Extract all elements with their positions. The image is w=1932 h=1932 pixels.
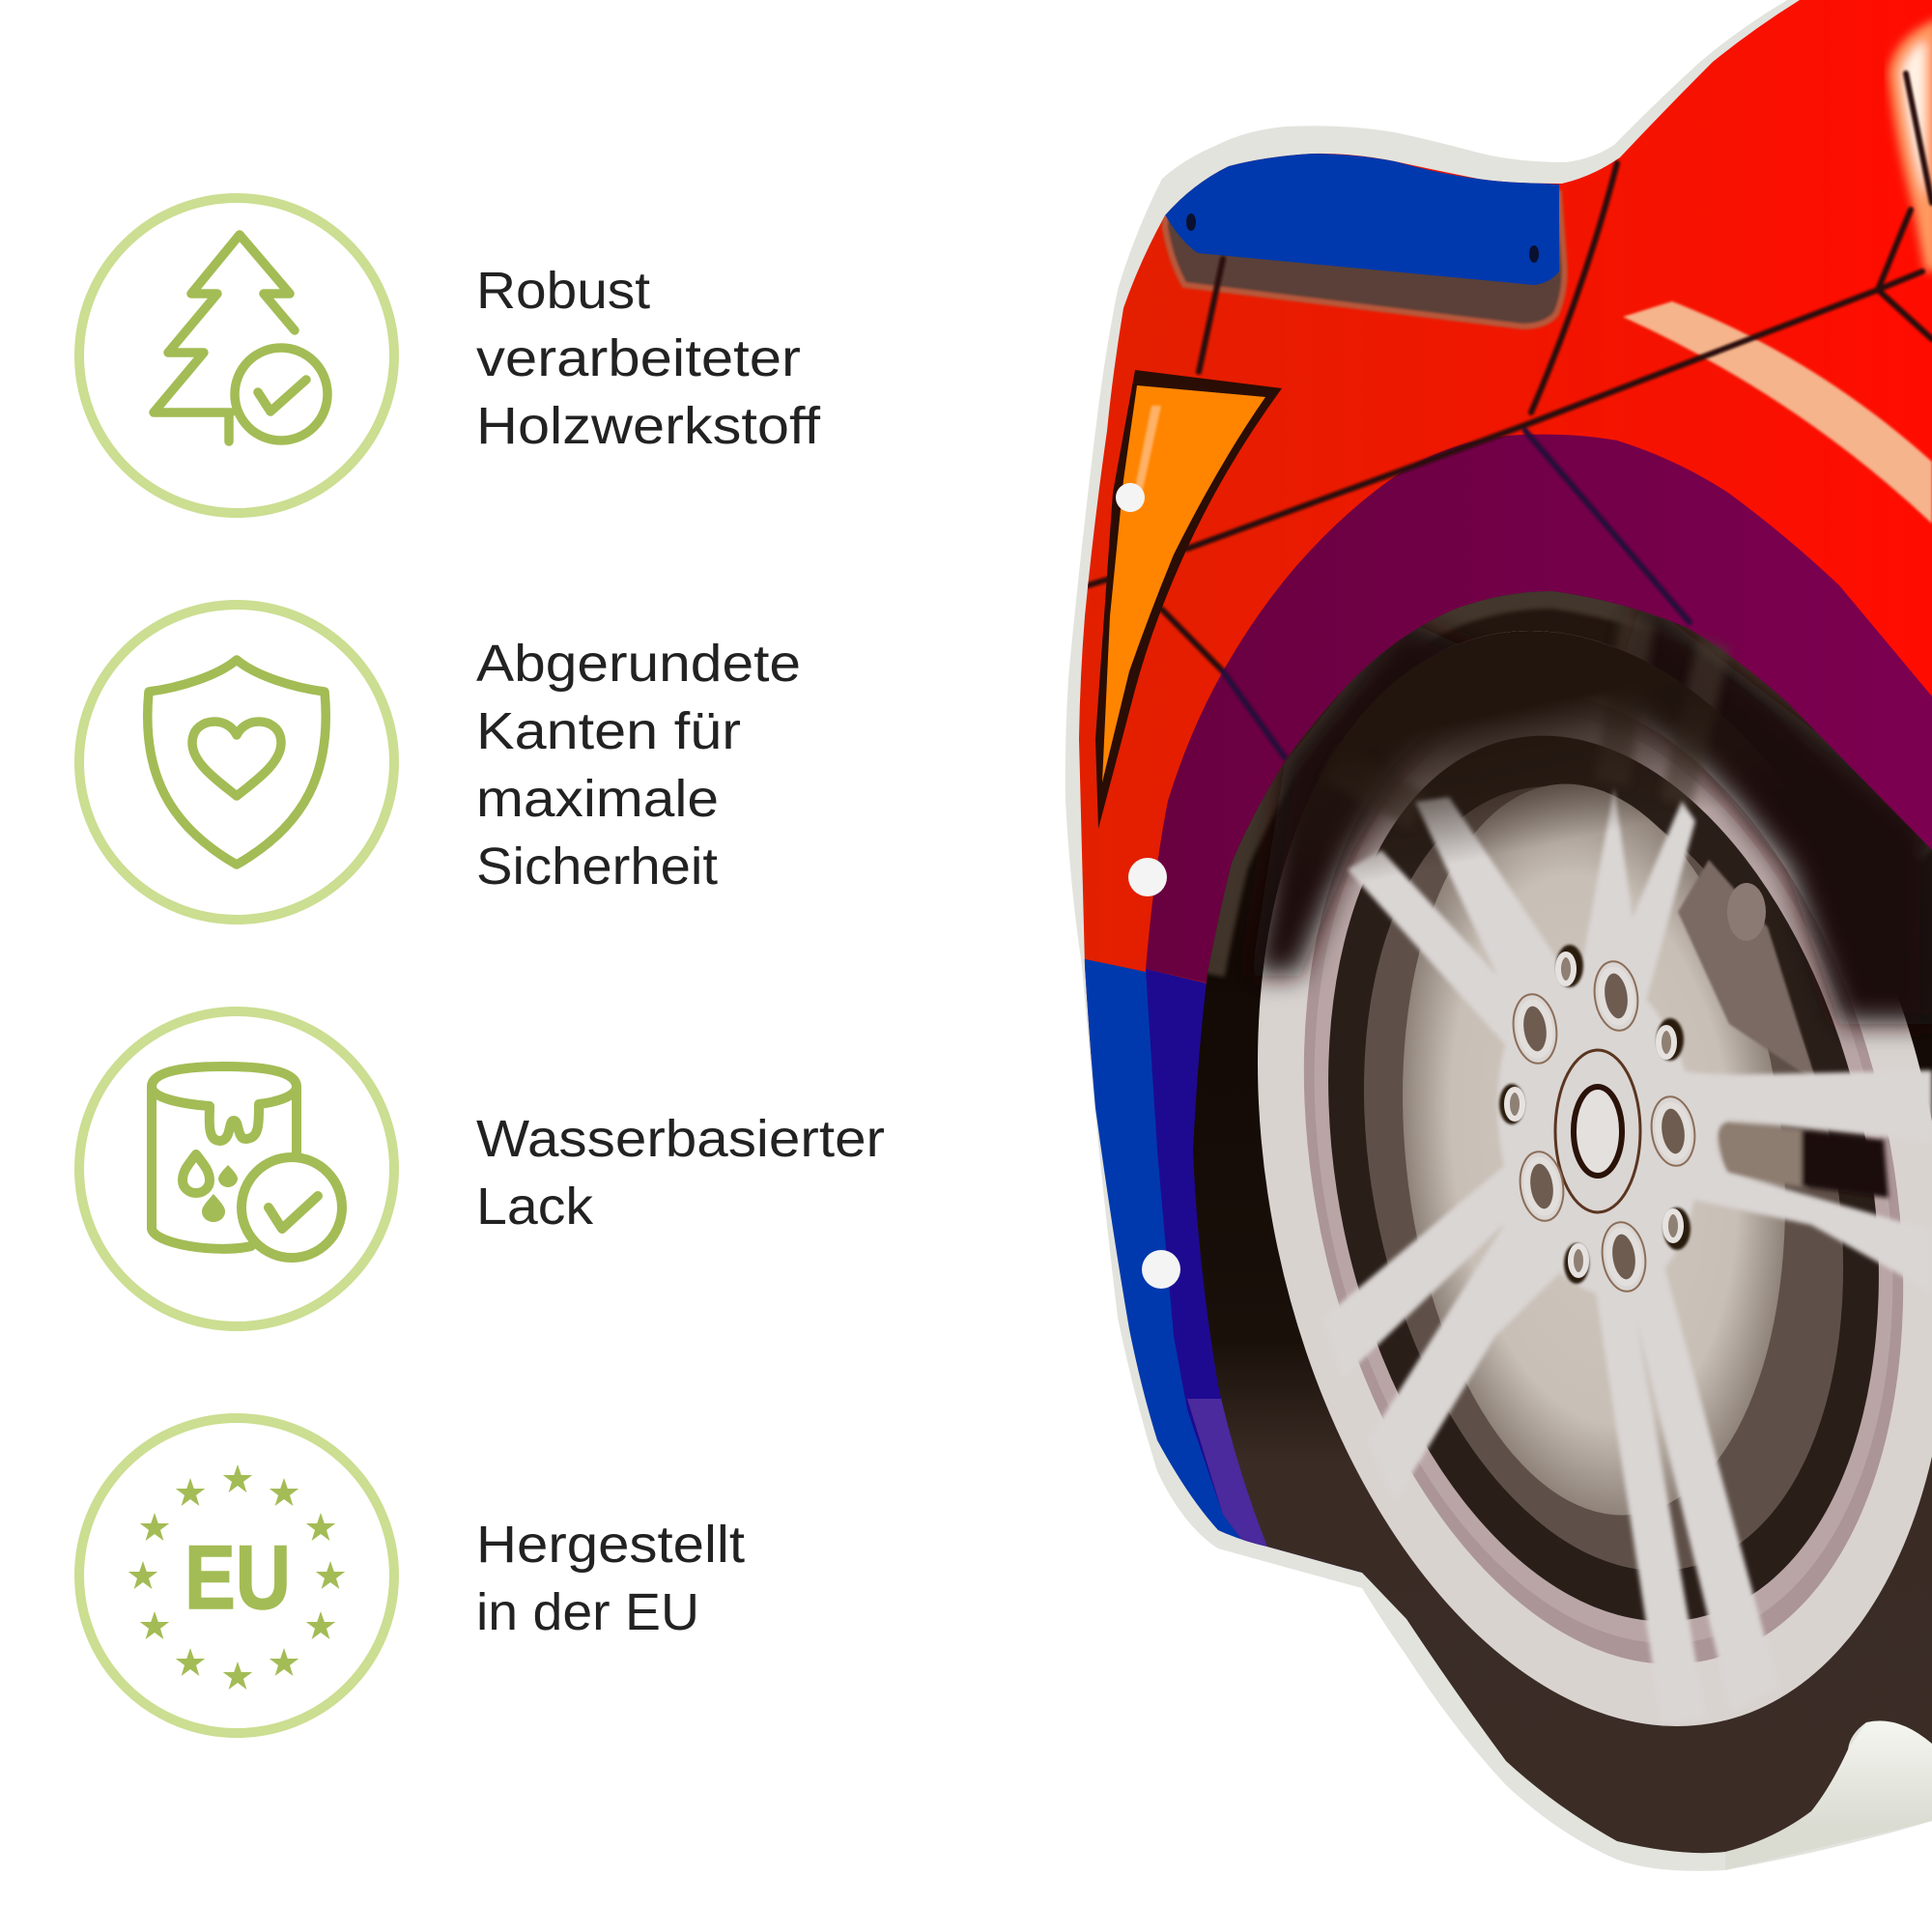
windscreen glow (1895, 29, 1932, 270)
icon: shield with heart (79, 605, 394, 920)
faint spoke shadows in the well (1333, 618, 1715, 811)
rim side shadows (1251, 599, 1932, 1024)
spokes (1323, 788, 1932, 1723)
hub centre (1555, 1050, 1640, 1212)
red body panel (1063, 0, 1932, 1063)
board edge (1065, 0, 1932, 1871)
white mounting dots (1116, 483, 1180, 1289)
feature: made in the EU (79, 1418, 745, 1733)
peach highlight stripe (1623, 301, 1932, 524)
text: made in the EU: Hergestellt (476, 1516, 745, 1574)
text: robust wood material (476, 262, 821, 455)
painted body (1063, 0, 1932, 1642)
icon: tree with check badge (79, 198, 394, 513)
text: water based paint: Wasserbasierter (476, 1110, 885, 1168)
purple wheel arch (1146, 435, 1932, 983)
panel: feature list (79, 198, 885, 1733)
lighter purple skirt bottom (1187, 1399, 1363, 1574)
small hole rims (1507, 954, 1681, 1275)
product photo: car bed panel with wheel (1063, 0, 1932, 1871)
text: rounded edges: maximale (476, 770, 719, 828)
brake disc (1368, 765, 1820, 1534)
text: water based paint (476, 1110, 885, 1236)
icon: EU stars (79, 1418, 394, 1733)
text: robust wood material: Robust (476, 262, 650, 320)
shadow over wheel top (1162, 566, 1932, 1791)
panel lines (1088, 73, 1932, 757)
small wheel holes (1499, 945, 1690, 1284)
well highlight edge (1208, 591, 1932, 974)
icon: paint can with check badge (79, 1011, 394, 1326)
amber side marker (1095, 370, 1282, 829)
indigo skirt under fender (1146, 969, 1359, 1573)
text: water based paint: Lack (476, 1178, 594, 1236)
text: robust wood material: verarbeiteter (476, 329, 801, 387)
feature: water based paint (79, 1011, 885, 1326)
alloy rim rings (1162, 566, 1932, 1791)
text: made in the EU (476, 1516, 745, 1641)
mounting holes (1186, 213, 1196, 231)
text: rounded edges: Kanten für (476, 702, 741, 760)
feature: rounded edges (79, 605, 801, 920)
rim window slot (1715, 1121, 1889, 1198)
icon: EU stars: EU (185, 1526, 291, 1628)
wheel (1162, 566, 1932, 1853)
text: rounded edges (476, 635, 801, 895)
brake caliper (1678, 860, 1816, 1082)
small hole notches (1499, 945, 1690, 1284)
feature: robust wood material (79, 198, 821, 513)
lower right board edge piece (1725, 1720, 1932, 1870)
bolt rings (1509, 958, 1699, 1294)
blue top panel (1165, 154, 1559, 285)
text: made in the EU: in der EU (476, 1583, 699, 1641)
text: rounded edges: Abgerundete (476, 635, 801, 693)
blue top panel shadow (1165, 193, 1565, 327)
text: robust wood material: Holzwerkstoff (476, 397, 821, 455)
tyre and wheel well (1193, 591, 1932, 1853)
large wheel bolts (1517, 968, 1691, 1285)
text: rounded edges: Sicherheit (476, 838, 718, 895)
blue lower skirt (1084, 958, 1359, 1573)
